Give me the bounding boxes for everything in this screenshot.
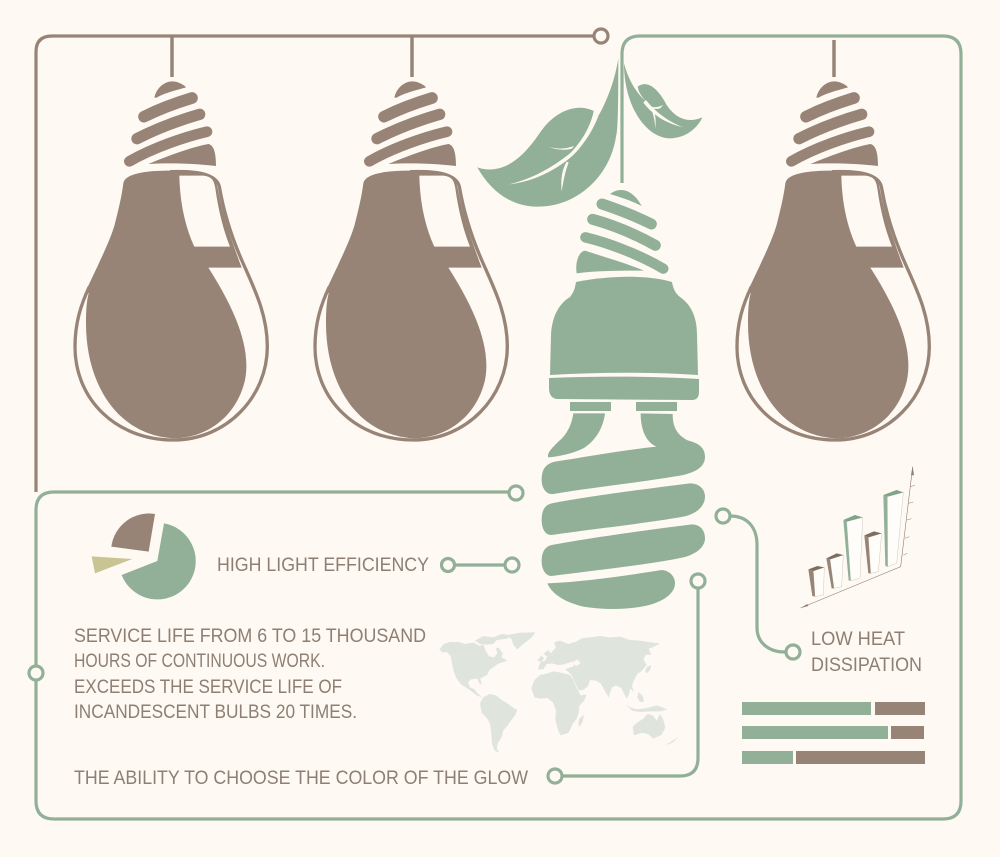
stacked bars xyxy=(742,702,925,764)
text block: service life: INCANDESCENT BULBS 20 TIMES. xyxy=(74,702,357,723)
icon: incandescent bulb 1 xyxy=(75,36,267,440)
connector: high light efficiency xyxy=(442,558,519,572)
label: high light efficiency: HIGH LIGHT EFFICIENCY xyxy=(217,555,429,576)
left leaf xyxy=(477,58,618,207)
bulb base xyxy=(550,277,698,375)
text block: service life: HOURS OF CONTINUOUS WORK. xyxy=(74,651,325,672)
3D bar chart xyxy=(801,467,915,608)
text block: service life: SERVICE LIFE FROM 6 TO 15 THOUSAND xyxy=(74,626,426,647)
label: low heat dissipation: DISSIPATION xyxy=(811,655,922,676)
screw thread xyxy=(576,190,663,273)
world map xyxy=(439,632,678,753)
icon: incandescent bulb 3 xyxy=(737,40,929,440)
spiral tube xyxy=(542,413,705,609)
pie chart xyxy=(92,514,196,599)
text: ability to choose the colour of the glow: THE ABILITY TO CHOOSE THE COLOR OF THE GLOW xyxy=(74,768,528,789)
icon: incandescent bulb 2 xyxy=(315,36,507,440)
connector: low heat dissipation xyxy=(716,509,800,659)
icon: energy-saving bulb with leaves xyxy=(477,58,705,609)
label: low heat dissipation: LOW HEAT xyxy=(811,629,905,650)
text block: service life xyxy=(74,626,426,723)
brown frame line xyxy=(36,29,608,492)
connector: colour of the glow xyxy=(548,574,705,783)
label: low heat dissipation xyxy=(811,629,922,676)
text block: service life: EXCEEDS THE SERVICE LIFE OF xyxy=(74,677,342,698)
right leaf xyxy=(624,63,702,138)
